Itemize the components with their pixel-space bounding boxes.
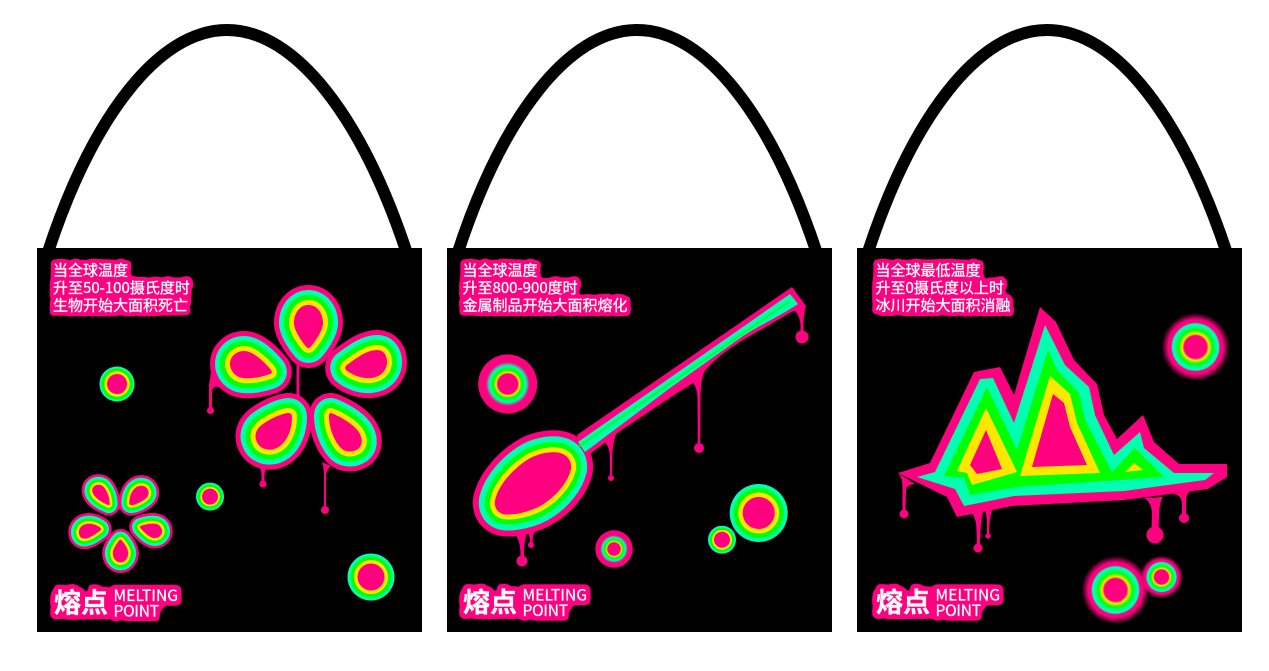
bag body	[37, 248, 422, 632]
circle: upper left	[100, 366, 134, 402]
logo: 熔点	[876, 581, 930, 620]
glow circle: bottom small	[1140, 556, 1183, 598]
caption text: 当全球温度	[53, 260, 128, 280]
small flower	[79, 485, 162, 562]
caption text: 升至0摄氏度以上时	[876, 277, 1004, 298]
caption text: 金属制品开始大面积熔化	[462, 294, 628, 316]
glow circle: bottom large	[1082, 556, 1150, 624]
caption text: 升至800-900度时	[462, 277, 578, 298]
caption text	[53, 260, 190, 316]
bag 2: metal melting	[447, 30, 832, 632]
logo	[876, 581, 1000, 621]
caption text: 当全球温度	[462, 260, 538, 280]
logo: POINT	[114, 600, 159, 622]
circle: right large	[730, 484, 788, 542]
logo: MELTING	[114, 584, 178, 606]
caption text: 当全球最低温度	[876, 260, 981, 280]
circle: lower right	[348, 554, 394, 600]
caption text	[876, 260, 1011, 316]
bag 1: biological death	[37, 30, 422, 632]
logo: MELTING	[936, 584, 1000, 606]
soft circle: upper left	[478, 354, 537, 414]
logo: 熔点	[463, 581, 517, 620]
caption text: 升至50-100摄氏度时	[53, 277, 190, 298]
caption text	[462, 260, 628, 316]
bag handle	[458, 30, 816, 252]
logo	[463, 581, 587, 621]
caption text: 生物开始大面积死亡	[53, 294, 188, 316]
bag handle	[868, 30, 1226, 252]
logo: MELTING	[522, 584, 587, 606]
bag body	[857, 248, 1242, 632]
circle: centre	[196, 483, 224, 511]
large flower	[230, 305, 387, 451]
logo: POINT	[522, 599, 568, 621]
caption text: 冰川开始大面积消融	[876, 294, 1011, 316]
bag body	[447, 248, 832, 632]
melting drips: spoon	[514, 306, 808, 566]
spoon	[495, 287, 806, 515]
logo: 熔点	[54, 582, 108, 620]
bag 3: glacier melting	[857, 30, 1242, 632]
melting drips: large flower	[207, 360, 331, 514]
melting drips: glacier	[898, 473, 1190, 552]
logo	[54, 582, 178, 622]
glow circle: upper right	[1162, 313, 1230, 381]
circle: right small	[708, 526, 736, 554]
logo: POINT	[936, 599, 981, 621]
bag handle	[48, 30, 406, 252]
soft circle: bottom	[595, 530, 633, 568]
glacier	[898, 307, 1227, 517]
